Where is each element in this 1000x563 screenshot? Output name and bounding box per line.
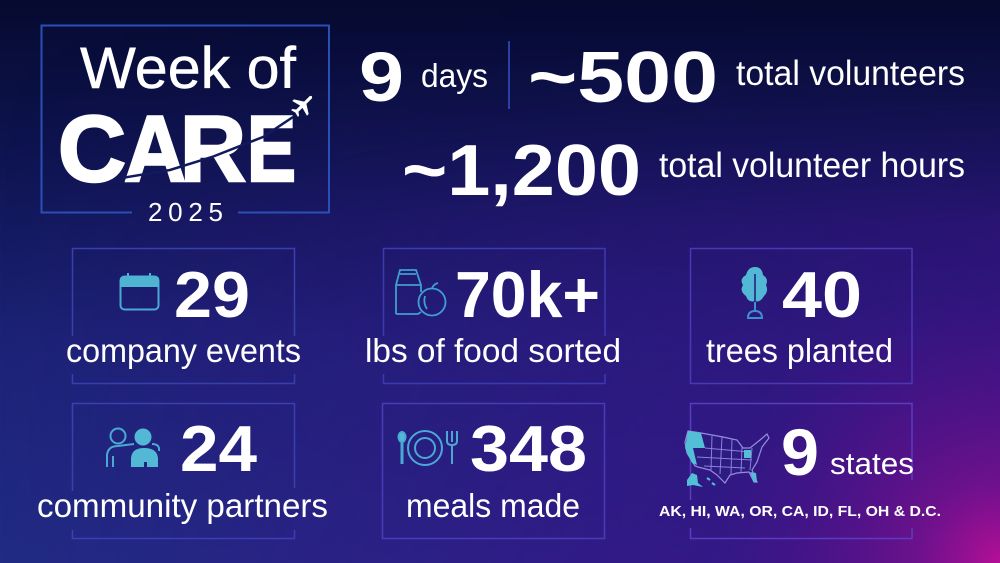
logo heading: CARE [58,96,296,201]
icon: airplane [287,89,319,121]
panel: community partners [37,404,328,538]
stat: total volunteers: total volunteers [736,54,965,93]
panel: company events [66,248,301,384]
stat: 9 days [359,38,488,116]
divider [508,41,510,109]
logo heading: CARE: C [58,96,126,201]
value: 40: 40 [782,258,862,331]
value: 9: 9 [781,415,819,489]
logo year: 2025: 2025 [148,197,223,227]
value: 348: 348 [470,412,587,485]
stat: total volunteer hours [402,131,965,211]
label: company events: company events [66,332,301,369]
label: community partners: community partners [37,487,328,524]
stat: 9 days: days [421,57,488,94]
icon: milk carton and apple [396,270,446,316]
label: state list: AK, HI, WA, OR, CA, ID, FL, OH & D.C. [659,503,941,520]
stat: total volunteers: ~500 [528,38,718,118]
value: 24: 24 [180,412,257,485]
logo: Week of CARE 2025 [42,26,329,227]
logo frame [42,26,329,212]
stat: total volunteer hours: total volunteer hours [659,146,965,185]
label: states: states [830,446,914,481]
value: 29: 29 [174,258,250,331]
panel: lbs of food sorted [365,248,621,384]
stat: total volunteers [528,38,965,118]
icon: two people [107,428,159,467]
panel: trees planted [690,248,912,384]
panel: states [659,404,941,538]
stat: total volunteer hours: ~1,200 [402,131,641,211]
icon: plate and cutlery [398,431,457,465]
label: trees planted: trees planted [706,332,893,369]
logo heading: CARE: E [247,96,296,201]
icon: tree [742,267,767,318]
value: 70k+: 70k+ [455,258,600,331]
icon: calendar [120,273,159,310]
panel: meals made [382,404,604,538]
icon: US map [685,431,769,487]
logo heading: Week of: Week of [80,36,297,101]
stat: 9 days: 9 [359,38,404,116]
label: meals made: meals made [406,487,580,524]
label: lbs of food sorted: lbs of food sorted [365,332,621,369]
logo heading: CARE: A [124,96,186,201]
logo heading: CARE: R [180,96,246,201]
